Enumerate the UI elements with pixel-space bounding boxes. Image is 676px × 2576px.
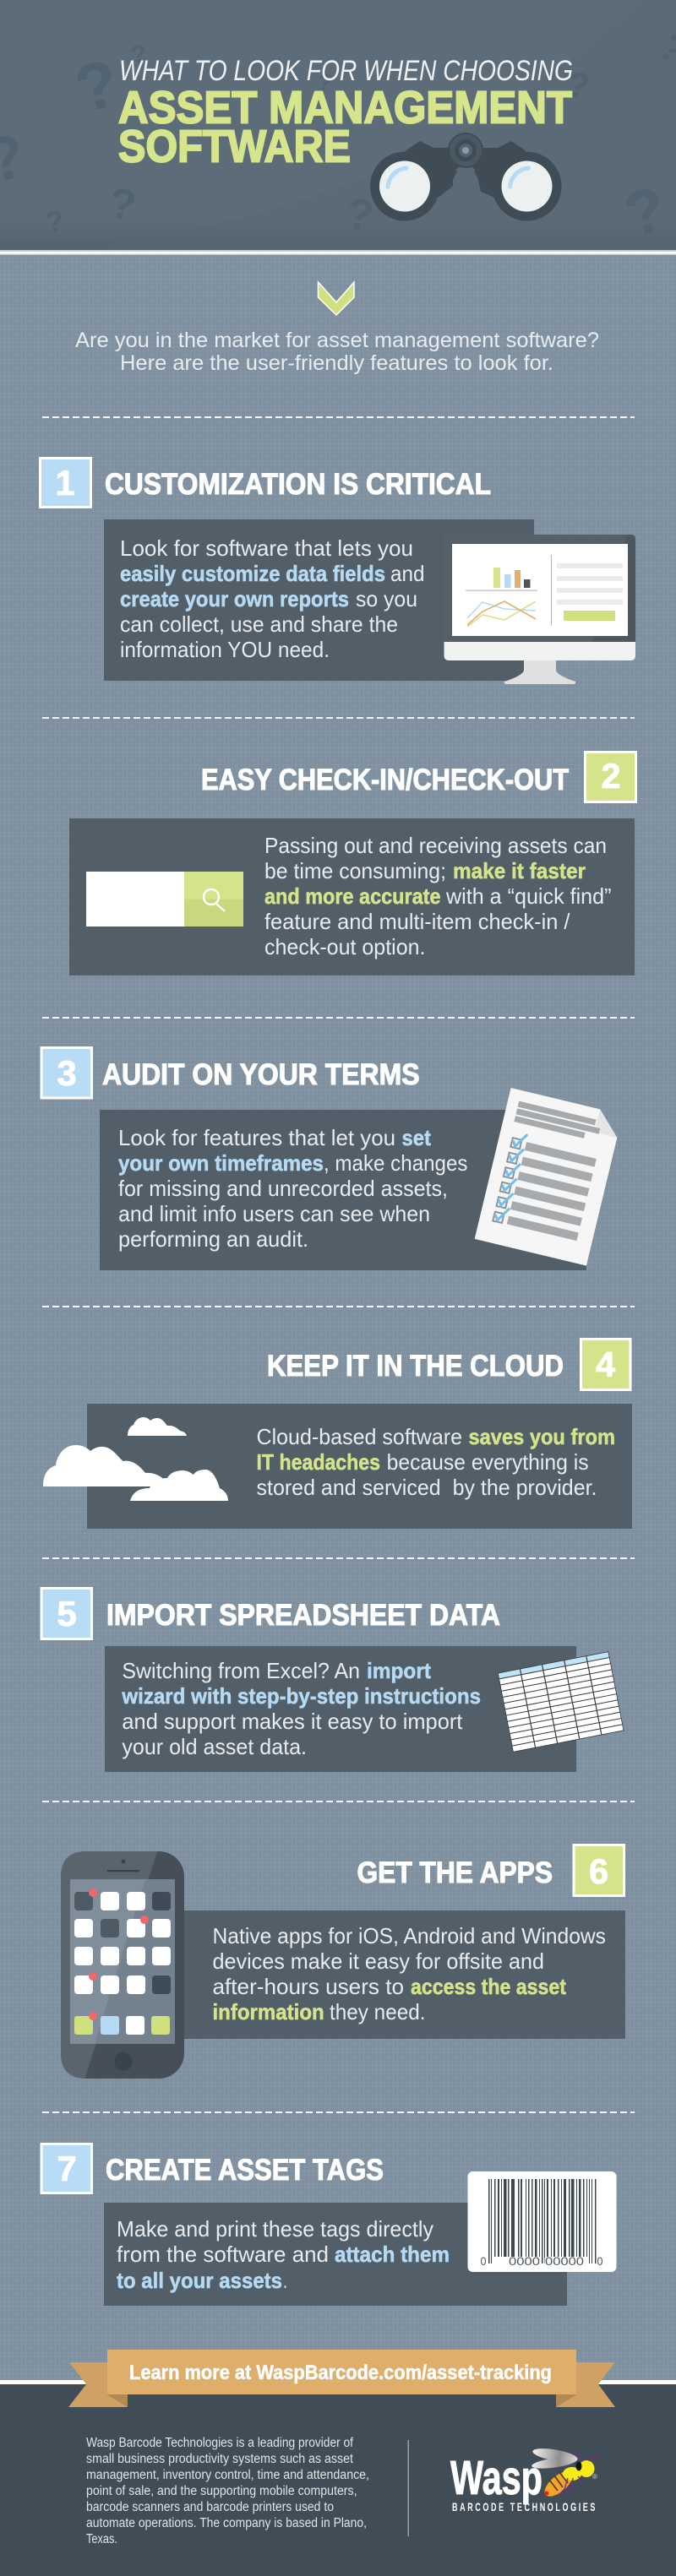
- text 5: Switching from Excel? An: [122, 1658, 360, 1683]
- text 5: and support makes it easy to import: [122, 1709, 463, 1734]
- text 1: [120, 535, 424, 662]
- text 4: Cloud-based software: [257, 1424, 462, 1449]
- text 1: can collect, use and share the: [120, 611, 398, 637]
- heading 3: AUDIT ON YOUR TERMS: [102, 1058, 419, 1091]
- company description: management, inventory control, time and attendance,: [86, 2468, 369, 2482]
- company description: small business productivity systems such as asset: [86, 2452, 354, 2466]
- icon: binoculars: [370, 133, 561, 221]
- section 5: spreadsheet: [41, 1588, 624, 1772]
- text 7: [117, 2216, 450, 2293]
- text 3: [118, 1125, 468, 1252]
- text 4: stored and serviced by the provider.: [257, 1475, 597, 1500]
- text 7: from the software and: [117, 2242, 329, 2267]
- badge 1: 1: [55, 463, 75, 503]
- text 4: [257, 1424, 615, 1500]
- text 7: .: [283, 2268, 287, 2293]
- panel 4: [87, 1404, 632, 1529]
- text 1: Look for software that lets you: [120, 535, 413, 561]
- banner: learn more ribbon: Learn more at WaspBarcode.com/asset-tracking: [129, 2361, 552, 2384]
- icon: desktop monitor with charts: [444, 535, 635, 684]
- question mark pattern: ?: [68, 44, 127, 128]
- question mark pattern: ?: [128, 40, 149, 69]
- question mark pattern: ?: [343, 188, 377, 241]
- badge 7: [41, 2144, 91, 2193]
- badge 2: [585, 752, 635, 802]
- icon: barcode label: 0000: [509, 2254, 540, 2268]
- text 5: import: [367, 1658, 431, 1683]
- text 2: make it faster: [453, 858, 586, 883]
- icon: barcode label: 0: [480, 2254, 487, 2268]
- header banner: [0, 0, 676, 250]
- badge 2: 2: [601, 756, 621, 796]
- question mark pattern: ?: [43, 204, 67, 240]
- report lines: [557, 563, 623, 621]
- company description: [86, 2436, 369, 2546]
- badge 4: 4: [596, 1345, 616, 1384]
- text 2: with a “quick find”: [445, 883, 612, 909]
- panel 3: [100, 1110, 586, 1270]
- section 6: apps: [61, 1845, 625, 2079]
- panel 7: [104, 2203, 567, 2306]
- text 3: and limit info users can see when: [118, 1201, 430, 1226]
- banner: learn more ribbon: [68, 2350, 615, 2407]
- badge 7: 7: [57, 2149, 77, 2188]
- icon: wasp: ®: [592, 2473, 597, 2481]
- text 4: IT headaches: [257, 1449, 380, 1475]
- section 2: check-in: [69, 752, 635, 976]
- logo: Wasp Barcode Technologies: Wasp: [450, 2451, 542, 2505]
- badge 5: [41, 1588, 91, 1639]
- company description: barcode scanners and barcode printers used to: [86, 2500, 334, 2514]
- logo: Wasp Barcode Technologies: [450, 2446, 601, 2514]
- text 2: feature and multi-item check-in /: [264, 909, 570, 934]
- panel 1: [104, 519, 534, 681]
- text 3: your own timeframes: [118, 1150, 324, 1176]
- question mark pattern: ?: [618, 172, 673, 250]
- text 3: for missing and unrecorded assets,: [118, 1176, 448, 1201]
- title: WHAT TO LOOK FOR WHEN CHOOSING: [119, 55, 573, 87]
- text 2: and more accurate: [264, 883, 441, 909]
- text 1: information YOU need.: [120, 637, 330, 662]
- heading 2: EASY CHECK-IN/CHECK-OUT: [201, 764, 569, 796]
- text 1: easily customize data fields: [120, 561, 385, 586]
- icon: barcode label: 00000: [545, 2254, 584, 2268]
- panel 2: [69, 818, 635, 976]
- icon: barcode label: [468, 2171, 617, 2272]
- text 6: information: [213, 1999, 324, 2024]
- text 3: set: [402, 1125, 431, 1150]
- panel 6: [184, 1910, 625, 2039]
- text 3: performing an audit.: [118, 1226, 308, 1252]
- text 1: create your own reports: [120, 586, 349, 611]
- intro text: Are you in the market for asset management software?: [75, 329, 599, 352]
- text 2: [264, 833, 612, 959]
- intro text: Here are the user-friendly features to look for.: [120, 351, 553, 375]
- question mark pattern: ?: [316, 68, 335, 96]
- icon: chevron down: [318, 282, 354, 315]
- icon: search box: [86, 872, 243, 927]
- bar chart: [466, 568, 537, 591]
- badge 6: 6: [589, 1851, 608, 1891]
- heading 7: CREATE ASSET TAGS: [106, 2154, 384, 2187]
- section 1: customization: [41, 458, 635, 684]
- text 4: saves you from: [468, 1424, 615, 1449]
- text 3: , make changes: [324, 1150, 468, 1176]
- badge 4: [581, 1340, 630, 1390]
- text 1: and: [390, 561, 424, 586]
- text 6: [213, 1923, 606, 2024]
- title: SOFTWARE: [118, 122, 351, 172]
- text 6: after-hours users to: [213, 1974, 404, 1999]
- section 3: audit: [41, 1047, 623, 1270]
- icon: smartphone: [61, 1851, 184, 2079]
- section 4: cloud: [43, 1340, 632, 1529]
- icon: barcode label: 0: [597, 2254, 603, 2268]
- icon: wasp: [531, 2446, 601, 2501]
- company description: automate operations. The company is based in Plano,: [86, 2516, 367, 2530]
- text 5: your old asset data.: [122, 1734, 307, 1759]
- text 7: attach them: [335, 2242, 450, 2267]
- text 6: they need.: [330, 1999, 426, 2024]
- company description: Texas.: [86, 2532, 117, 2546]
- question mark pattern: [0, 24, 676, 250]
- text 3: Look for features that let you: [118, 1125, 395, 1150]
- text 7: to all your assets: [117, 2268, 282, 2293]
- intro text: [75, 329, 599, 375]
- text 2: check-out option.: [264, 934, 426, 959]
- panel 5: [105, 1646, 576, 1772]
- badge 1: [41, 458, 91, 507]
- badge 5: 5: [57, 1594, 77, 1633]
- app icons: [74, 1892, 171, 2035]
- title: ASSET MANAGEMENT: [118, 83, 572, 133]
- text 2: be time consuming;: [264, 858, 446, 883]
- text 5: [121, 1658, 481, 1759]
- icon: checklist document: [475, 1088, 623, 1266]
- title: [118, 55, 573, 172]
- question mark pattern: ?: [106, 178, 139, 231]
- heading 1: CUSTOMIZATION IS CRITICAL: [105, 468, 491, 501]
- footer background: [0, 2380, 676, 2576]
- heading 4: KEEP IT IN THE CLOUD: [267, 1350, 564, 1383]
- text 6: access the asset: [411, 1974, 566, 1999]
- line chart: [467, 601, 536, 627]
- text 2: Passing out and receiving assets can: [264, 833, 607, 858]
- badge 6: [574, 1845, 624, 1895]
- badge 3: [41, 1047, 91, 1098]
- text 4: because everything is: [387, 1449, 589, 1475]
- text 6: Native apps for iOS, Android and Windows: [213, 1923, 606, 1948]
- company description: Wasp Barcode Technologies is a leading provider of: [86, 2436, 354, 2450]
- heading 5: IMPORT SPREADSHEET DATA: [106, 1599, 500, 1632]
- badge 3: 3: [57, 1053, 77, 1093]
- company description: point of sale, and the supporting mobile computers,: [86, 2484, 357, 2498]
- icon: clouds: [43, 1417, 228, 1501]
- question mark pattern: ?: [564, 63, 592, 106]
- section 7: asset tags: [41, 2144, 617, 2306]
- heading 6: GET THE APPS: [357, 1856, 553, 1889]
- text 5: wizard with step-by-step instructions: [121, 1683, 481, 1709]
- text 6: devices make it easy for offsite and: [213, 1948, 544, 1974]
- text 1: so you: [356, 586, 417, 611]
- text 7: Make and print these tags directly: [117, 2216, 433, 2242]
- logo: Wasp Barcode Technologies: BARCODE TECHNOLOGIES: [452, 2500, 597, 2514]
- icon: spreadsheet: [498, 1652, 624, 1752]
